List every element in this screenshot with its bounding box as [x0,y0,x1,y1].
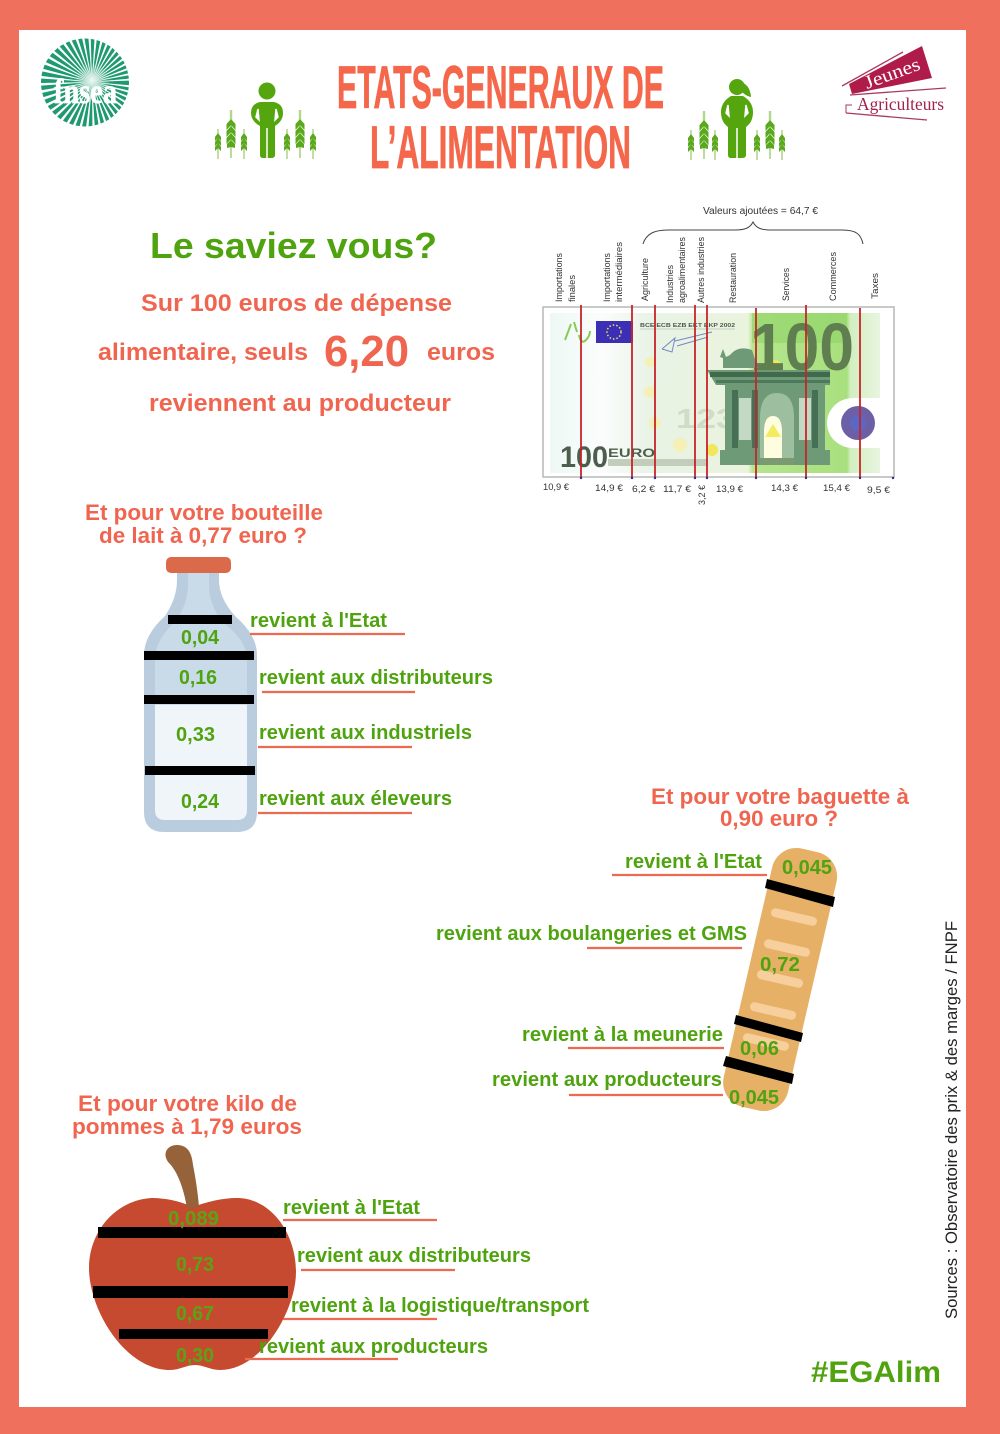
red dividers [581,305,860,477]
text block: 6,20 euros au producteur: Sur 100 euros de dépense [141,290,452,317]
euro values: 14,3 € [771,483,799,494]
signature [662,332,712,352]
euro values: 3,2 € [697,484,708,505]
euro values: 9,5 € [867,485,891,496]
category labels: Importations [602,253,612,302]
category labels: Commerces [828,252,838,301]
category labels: Taxes [870,272,880,299]
heading: baguette: 0,90 euro ? [720,806,838,831]
category labels: agroalimentaires [677,237,687,303]
labels: baguette: revient aux producteurs [492,1069,722,1091]
labels: bottle [250,610,493,813]
hologram patch [827,398,853,448]
brace [643,222,863,244]
illustration: milk bottle: 0,16 [179,667,217,689]
labels: bottle: revient aux éleveurs [259,788,452,810]
category labels [554,237,880,303]
illustration: apple: 0,089 [168,1208,219,1230]
icon: farmer woman in wheat [688,79,785,160]
labels: apple: revient à l'Etat [283,1197,420,1219]
labels: apple: revient à la logistique/transport [291,1295,589,1317]
illustration: baguette: 0,045 [729,1087,779,1109]
title: L’ALIMENTATION [370,114,631,181]
heading: pommes: pommes à 1,79 euros [72,1114,302,1139]
category labels: finales [567,274,577,302]
illustration: milk bottle: 0,33 [176,724,215,746]
icon: farmer man in wheat [215,82,316,159]
category labels: Services [781,268,791,301]
logo: Jeunes Agriculteurs [842,46,946,120]
hashtag: #EGAlim [811,1356,941,1389]
text block: 6,20 euros au producteur [98,290,495,417]
EU flag [596,321,633,343]
heading: bouteille de lait [85,500,323,548]
BCE mark: BCE ECB EZB EKT EKP 2002 [640,323,735,329]
labels: bottle: revient à l'Etat [250,610,387,632]
text block: 6,20 euros au producteur: reviennent au producteur [149,390,451,417]
green mark [565,322,590,342]
text block: 6,20 euros au producteur: euros [427,339,495,366]
labels: apple: revient aux producteurs [259,1336,488,1358]
labels: baguette: revient à la meunerie [522,1024,723,1046]
brace label: valeurs ajoutees: Valeurs ajoutées = 64,7 € [703,206,818,217]
heading: baguette [651,784,910,831]
heading: bouteille de lait: Et pour votre bouteille [85,500,323,525]
illustration: baguette: 0,045 [782,857,832,879]
logo: Jeunes Agriculteurs: Agriculteurs [857,94,944,114]
illustration: milk bottle: 0,04 [181,627,220,649]
labels: baguette: revient à l'Etat [625,851,762,873]
numeral 100 EURO: 100 [560,441,608,474]
illustration: baguette [718,843,842,1116]
heading: bouteille de lait: de lait à 0,77 euro ? [99,523,307,548]
euro values: 14,9 € [595,483,624,494]
category labels: Autres industries [696,237,706,303]
title [337,54,664,181]
logo: Jeunes Agriculteurs: Jeunes [862,54,923,94]
euro values: 15,4 € [823,483,851,494]
illustration: apple: 0,67 [176,1303,214,1325]
category labels: Importations [554,253,564,302]
labels: apple: revient aux distributeurs [297,1245,531,1267]
category labels: intermédiaires [614,241,624,302]
labels: bottle: revient aux distributeurs [259,667,493,689]
text block: 6,20 euros au producteur: alimentaire, seuls [98,339,308,366]
illustration: apple: 0,30 [176,1345,214,1367]
portal [720,348,758,368]
title: ETATS-GENERAUX DE [337,54,664,121]
heading: baguette: Et pour votre baguette à [651,784,910,809]
illustration: milk bottle [144,557,257,832]
logo: FNSEA: fnsea [54,72,117,111]
source note: Sources : Observatoire des prix & des marges / FNPF [942,921,961,1319]
stars [644,357,687,452]
euro values: 10,9 € [543,482,570,493]
axis ticks [580,477,894,479]
banknote: EURO [608,446,655,460]
labels: apple [245,1197,589,1359]
category labels: Industries [665,265,675,303]
category labels: Agriculture [640,258,650,301]
chart: 100 euro banknote breakdown [543,206,894,505]
labels: baguette [436,851,767,1095]
text block: 6,20 euros au producteur: 6,20 [324,327,409,376]
euro values: 6,2 € [632,484,656,495]
heading: pommes [72,1091,302,1139]
banknote [543,307,894,477]
illustration: apple [89,1145,296,1370]
numeral 123: 123 [676,403,736,434]
illustration: baguette: 0,72 [760,954,800,976]
euro values: 13,9 € [716,484,744,495]
numeral 100 large: 100 [750,310,854,385]
labels: bottle: revient aux industriels [259,722,472,744]
illustration: apple: 0,73 [176,1254,214,1276]
labels: baguette: revient aux boulangeries et GMS [436,923,747,945]
illustration: milk bottle: 0,24 [181,791,220,813]
logo: FNSEA [54,46,128,118]
heading: pommes: Et pour votre kilo de [78,1091,297,1116]
euro values: 11,7 € [663,484,692,495]
euro values [543,482,891,505]
illustration: baguette: 0,06 [740,1038,779,1060]
heading: Le saviez vous: Le saviez vous? [150,225,437,266]
category labels: Restauration [728,253,738,303]
